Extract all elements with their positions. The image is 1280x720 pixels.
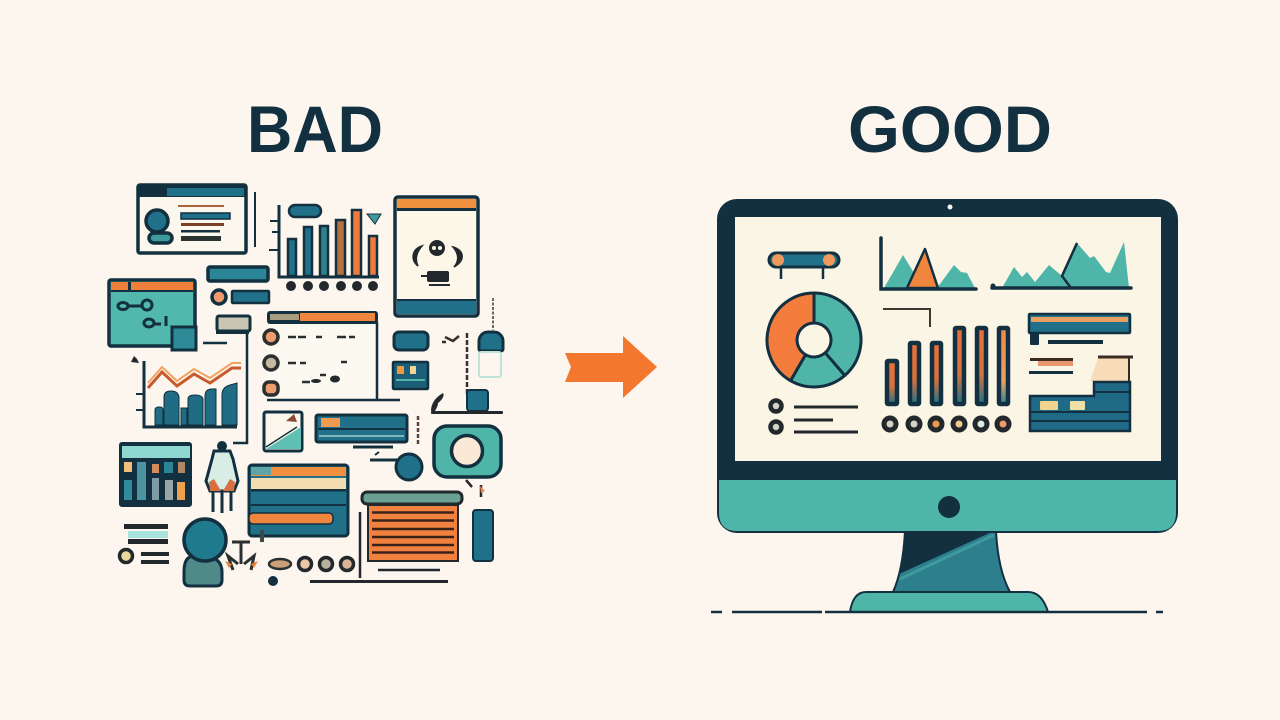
screen: donut chart: [767, 293, 861, 387]
screen: pill header: [769, 253, 839, 279]
title: BAD: BAD: [247, 92, 383, 166]
magnifier: [353, 447, 422, 480]
screen: bar chart: [887, 328, 1008, 404]
ground line: [711, 611, 1163, 613]
connector widget: [203, 316, 250, 443]
small bars and status dot: [208, 267, 269, 304]
monitor stand: [893, 531, 1010, 592]
screen: legend: [770, 400, 858, 432]
power button: [938, 496, 960, 518]
monitor base: [850, 592, 1048, 612]
monitor: [711, 199, 1178, 612]
person icon: [184, 519, 226, 586]
bar chart with axis: [269, 205, 381, 291]
teal camera widget: [434, 426, 501, 497]
monitor chin: [719, 480, 1176, 531]
screen: small label: [883, 309, 930, 327]
legend lines and bullet: [120, 524, 169, 564]
arrow: [565, 336, 657, 398]
screen: mountain chart with orange peak: [881, 238, 976, 289]
column table: [120, 443, 191, 506]
lamp icon: [206, 441, 238, 513]
status circles row: [298, 558, 354, 570]
screen: data panel: [1029, 314, 1133, 431]
line and bar combo chart: [131, 356, 241, 427]
orange striped table: [310, 492, 462, 583]
panel: cluttered bad dashboard collage: [109, 185, 503, 586]
tablet panel: [395, 197, 478, 316]
title: GOOD: GOOD: [848, 92, 1052, 166]
tall blue block: [473, 510, 493, 561]
picture card: [264, 412, 302, 451]
monitor body: [717, 199, 1178, 533]
profile window: [138, 185, 246, 253]
screen: area chart: [990, 242, 1131, 288]
small widgets cluster: [393, 298, 503, 414]
large window with list: [264, 311, 400, 400]
screen: dots row: [884, 418, 1009, 430]
camera dot: [948, 204, 952, 210]
divider line by profile window: [254, 192, 256, 247]
blue progress panel: [316, 415, 418, 446]
teal window: [109, 280, 196, 350]
screen: [735, 217, 1161, 461]
scattered tool icons: [225, 530, 291, 586]
stacked panels: [249, 465, 348, 536]
